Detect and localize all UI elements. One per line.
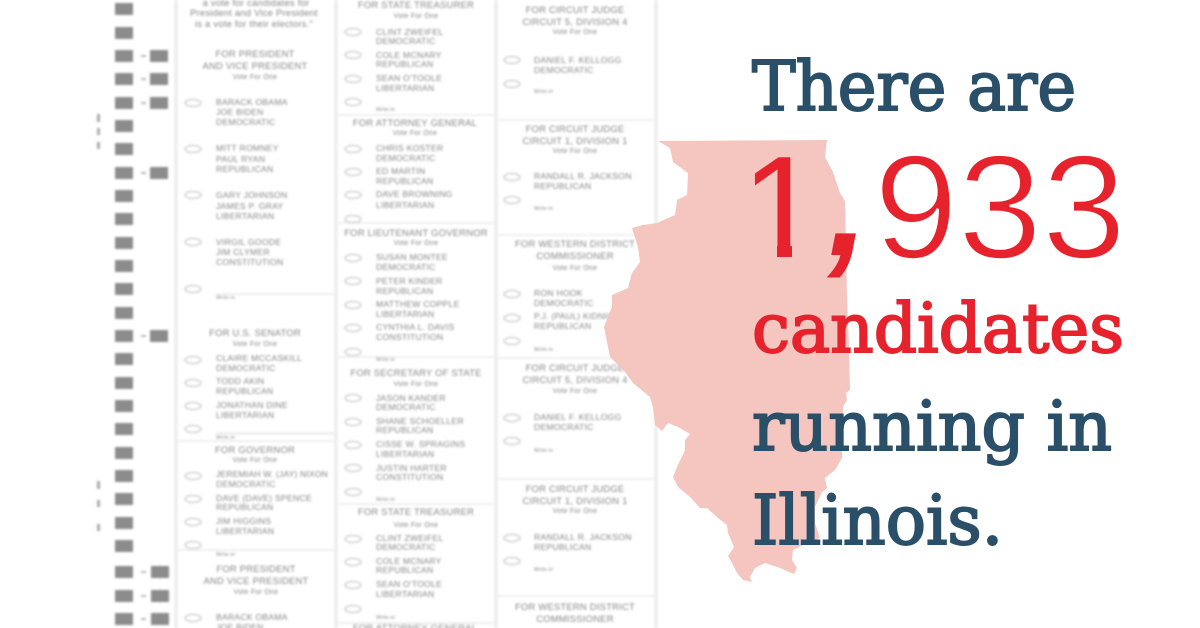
ballot column 1: federal and governor races: JONATHAN DINE: [216, 400, 288, 410]
ballot column 3: judicial and district races: DANIEL F. KELLOGG: [534, 412, 622, 422]
ballot column 1: federal and governor races: is a vote for their electors.": [195, 18, 313, 29]
ballot column 2: state races: Write-in: [376, 107, 395, 113]
ballot column 3: judicial and district races: RANDALL R. JACKSON: [534, 171, 632, 181]
ballot column 2: state races: CONSTITUTION: [376, 472, 443, 482]
ballot column 3: judicial and district races: CIRCUIT 1, DIVISION 1: [522, 495, 628, 506]
ballot column 1: federal and governor races: JOE BIDEN: [216, 107, 264, 117]
ballot column 3: judicial and district races: COMMISSIONER: [536, 613, 614, 624]
ballot column 3: judicial and district races: CIRCUIT 5, DIVISION 4: [522, 16, 628, 27]
ballot column 1: federal and governor races: LIBERTARIAN: [216, 410, 274, 420]
ballot column 2: state races: Vote For One: [393, 130, 437, 137]
headline: running in: running in: [752, 388, 1112, 467]
ballot column 3: judicial and district races: DEMOCRATIC: [534, 298, 594, 308]
ballot column 1: federal and governor races: JIM CLYMER: [216, 247, 270, 257]
ballot column 1: federal and governor races: CONSTITUTION: [216, 257, 283, 267]
ballot column 3: judicial and district races: FOR CIRCUIT JUDGE: [526, 483, 624, 494]
ballot column 3: judicial and district races: DEMOCRATIC: [534, 422, 594, 432]
ballot column 2: state races: DEMOCRATIC: [376, 542, 436, 552]
ballot column 2: state races: DEMOCRATIC: [376, 153, 436, 163]
ballot column 1: federal and governor races: JEREMIAH W. (JAY) NIXON: [216, 469, 328, 479]
ballot column 2: state races: [344, 0, 488, 628]
ballot column 2: state races: SEAN O'TOOLE: [376, 579, 442, 589]
ballot column 2: state races: FOR LIEUTENANT GOVERNOR: [344, 227, 488, 238]
ballot column 1: federal and governor races: FOR U.S. SENATOR: [209, 327, 301, 338]
ballot column 3: judicial and district races: [515, 4, 635, 624]
ballot column 1: federal and governor races: Write-in: [216, 295, 235, 301]
ballot column 3: judicial and district races: FOR WESTERN DISTRICT: [515, 238, 635, 249]
ballot column 2: state races: CLINT ZWEIFEL: [376, 27, 444, 37]
ballot column 1: federal and governor races: President and Vice President: [190, 7, 318, 18]
ballot column 2: state races: LIBERTARIAN: [376, 200, 434, 210]
ballot column 1: federal and governor races: FOR GOVERNOR: [215, 444, 295, 455]
ballot column 1: federal and governor races: BARACK OBAMA: [216, 97, 288, 107]
ballot column 1: federal and governor races: FOR PRESIDENT: [216, 563, 296, 574]
ballot column 1: federal and governor races: AND VICE PRESIDENT: [202, 60, 308, 71]
ballot column 1: federal and governor races: DEMOCRATIC: [216, 363, 276, 373]
ballot column 3: judicial and district races: Write-in: [534, 206, 553, 212]
ballot column 1: federal and governor races: GARY JOHNSON: [216, 190, 287, 200]
ballot column 2: state races: Write-in: [376, 357, 395, 363]
ballot column 1: federal and governor races: JIM HIGGINS: [216, 516, 271, 526]
ballot column 1: federal and governor races: Vote For One: [234, 589, 278, 596]
ballot column 3: judicial and district races: Vote For One: [553, 29, 597, 36]
ballot column 2: state races: Vote For One: [394, 522, 438, 529]
ballot column 2: state races: ED MARTIN: [376, 166, 425, 176]
ballot column 1: federal and governor races: Write-in: [216, 552, 235, 558]
key number: 1,933: 933: [874, 125, 1126, 290]
ballot sheet: [97, 0, 658, 628]
ballot column 3: judicial and district races: REPUBLICAN: [534, 321, 591, 331]
ballot column 3: judicial and district races: CIRCUIT 1, DIVISION 1: [522, 135, 628, 146]
ballot column rules: [174, 0, 658, 628]
headline: There are: There are: [752, 48, 1076, 127]
ballot column 1: federal and governor races: LIBERTARIAN: [216, 211, 274, 221]
ballot ovals: [185, 28, 520, 622]
ballot column 1: federal and governor races: DEMOCRATIC: [216, 479, 276, 489]
ballot column 2: state races: Vote For One: [394, 381, 438, 388]
ballot column 2: state races: JASON KANDER: [376, 393, 446, 403]
ballot column 2: state races: LIBERTARIAN: [376, 589, 434, 599]
ballot column 2: state races: Vote For One: [394, 13, 438, 20]
ballot column 2: state races: REPUBLICAN: [376, 59, 433, 69]
ballot column 1: federal and governor races: JAMES P. GRAY: [216, 201, 283, 211]
ballot column 1: federal and governor races: DEMOCRATIC: [216, 117, 276, 127]
ballot column 2: state races: Vote For One: [394, 240, 438, 247]
ballot column 2: state races: CHRIS KOSTER: [376, 143, 443, 153]
ballot column 1: federal and governor races: FOR PRESIDENT: [215, 48, 295, 59]
ballot column 1: federal and governor races: LIBERTARIAN: [216, 526, 274, 536]
ballot column 3: judicial and district races: Vote For One: [553, 148, 597, 155]
ballot column 1: federal and governor races: CLAIRE MCCASKILL: [216, 353, 302, 363]
ballot column 1: federal and governor races: VIRGIL GOODE: [216, 237, 281, 247]
ballot column 1: federal and governor races: MITT ROMNEY: [216, 143, 279, 153]
ballot column 3: judicial and district races: CIRCUIT 5, DIVISION 4: [522, 374, 628, 385]
ballot column 2: state races: REPUBLICAN: [376, 286, 433, 296]
ballot column 1: federal and governor races: Vote For One: [233, 341, 277, 348]
ballot column 2: state races: Write-in: [376, 615, 395, 621]
ballot column 2: state races: REPUBLICAN: [376, 425, 433, 435]
ballot column 3: judicial and district races: COMMISSIONER: [536, 250, 614, 261]
ballot column 2: state races: Write-in: [376, 497, 395, 503]
ballot column 3: judicial and district races: RON HOOK: [534, 288, 583, 298]
ballot column 3: judicial and district races: Vote For One: [553, 265, 597, 272]
ballot column 1: federal and governor races: [190, 0, 328, 628]
ballot column 3: judicial and district races: Vote For One: [553, 508, 597, 515]
ballot column 1: federal and governor races: PAUL RYAN: [216, 154, 265, 164]
ballot column 3: judicial and district races: Write-in: [534, 567, 553, 573]
ballot column 2: state races: REPUBLICAN: [376, 565, 433, 575]
ballot column 2: state races: SEAN O'TOOLE: [376, 73, 442, 83]
ballot column 2: state races: FOR SECRETARY OF STATE: [350, 367, 482, 378]
headline: Illinois.: Illinois.: [752, 482, 1003, 561]
ballot column 2: state races: FOR ATTORNEY GENERAL: [353, 117, 477, 128]
ballot column 3: judicial and district races: Write-in: [534, 89, 553, 95]
ballot column 1: federal and governor races: Write-in: [216, 435, 235, 441]
ballot column 1: federal and governor races: DAVE (DAVE) SPENCE: [216, 493, 312, 503]
ballot column 1: federal and governor races: TODD AKIN: [216, 376, 264, 386]
ballot column 3: judicial and district races: FOR CIRCUIT JUDGE: [526, 362, 624, 373]
ballot column 2: state races: DAVE BROWNING: [376, 189, 453, 199]
ballot column 2: state races: MATTHEW COPPLE: [376, 299, 460, 309]
ballot column 2: state races: CONSTITUTION: [376, 332, 443, 342]
ballot column 2: state races: COLE MCNARY: [376, 50, 442, 60]
ballot column 3: judicial and district races: FOR CIRCUIT JUDGE: [526, 123, 624, 134]
ballot column 3: judicial and district races: Vote For One: [553, 388, 597, 395]
key number: 1,933: ,: [826, 124, 868, 286]
ballot column 2: state races: DEMOCRATIC: [376, 36, 436, 46]
ballot timing marks: [97, 3, 169, 625]
ballot column 2: state races: SHANE SCHOELLER: [376, 416, 464, 426]
ballot column 2: state races: SUSAN MONTEE: [376, 252, 448, 262]
ballot column 2: state races: CLINT ZWEIFEL: [376, 533, 444, 543]
ballot column 3: judicial and district races: FOR CIRCUIT JUDGE: [526, 4, 624, 15]
ballot column 3: judicial and district races: Write-in: [534, 347, 553, 353]
key number: 1,933: 1: [741, 126, 822, 288]
ballot column 3: judicial and district races: DANIEL F. KELLOGG: [534, 55, 622, 65]
key number: 1,933: [754, 156, 1118, 278]
ballot column 2: state races: CYNTHIA L. DAVIS: [376, 322, 454, 332]
ballot column 2: state races: COLE MCNARY: [376, 556, 442, 566]
ballot column 2: state races: FOR STATE TREASURER: [358, 506, 474, 517]
ballot column 3: judicial and district races: REPUBLICAN: [534, 181, 591, 191]
ballot column 1: federal and governor races: BARACK OBAMA: [216, 612, 288, 622]
ballot column 3: judicial and district races: RANDALL R. JACKSON: [534, 532, 632, 542]
ballot column 2: state races: DEMOCRATIC: [376, 402, 436, 412]
ballot column 1: federal and governor races: Vote For One: [233, 74, 277, 81]
ballot column 2: state races: LIBERTARIAN: [376, 309, 434, 319]
ballot column 1: federal and governor races: Vote For One: [233, 457, 277, 464]
ballot column 3: judicial and district races: DEMOCRATIC: [534, 65, 594, 75]
ballot column 1: federal and governor races: REPUBLICAN: [216, 502, 273, 512]
ballot column 3: judicial and district races: REPUBLICAN: [534, 542, 591, 552]
ballot column 2: state races: JUSTIN HARTER: [376, 463, 447, 473]
headline: candidates: candidates: [752, 290, 1124, 369]
ballot column 1: federal and governor races: REPUBLICAN: [216, 386, 273, 396]
ballot column 3: judicial and district races: FOR WESTERN DISTRICT: [515, 601, 635, 612]
ballot column 2: state races: LIBERTARIAN: [376, 83, 434, 93]
Illinois state map: [604, 140, 850, 582]
ballot column 1: federal and governor races: AND VICE PRESIDENT: [203, 575, 309, 586]
ballot column 2: state races: PETER KINDER: [376, 276, 443, 286]
ballot column 3: judicial and district races: P.J. (PAUL) KIDNIG: [534, 311, 614, 321]
ballot column 2: state races: REPUBLICAN: [376, 176, 433, 186]
ballot column 2: state races: DEMOCRATIC: [376, 262, 436, 272]
ballot column 2: state races: LIBERTARIAN: [376, 449, 434, 459]
ballot column 1: federal and governor races: REPUBLICAN: [216, 164, 273, 174]
ballot column 2: state races: CISSE W. SPRAGINS: [376, 439, 465, 449]
ballot column 3: judicial and district races: Write-in: [534, 448, 553, 454]
